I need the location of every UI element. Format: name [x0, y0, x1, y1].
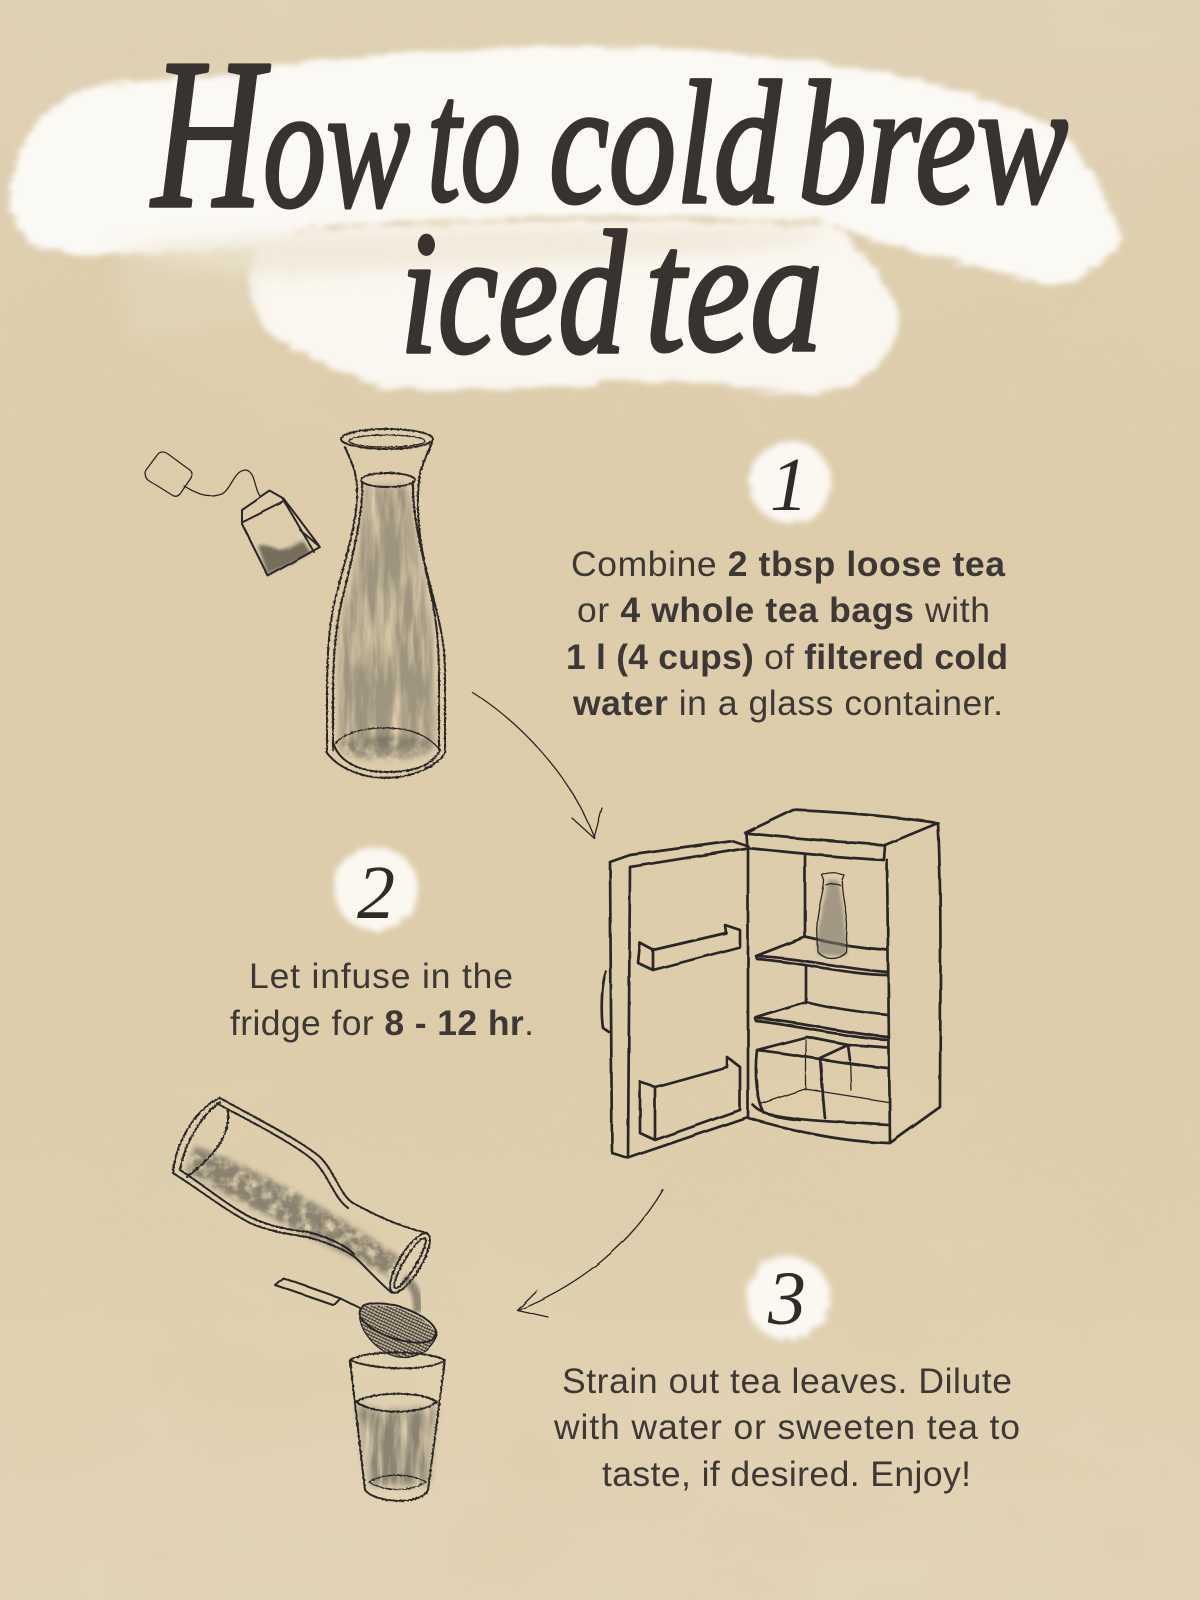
word: iced: iced — [400, 196, 627, 391]
line 2: fridge for 8 - 12 hr. — [230, 1003, 534, 1043]
number blot — [334, 847, 418, 931]
fridge interior back — [805, 855, 806, 1003]
line 3: 1 l (4 cups) of filtered cold — [566, 637, 1008, 677]
tea stream — [404, 1278, 418, 1312]
line 4: water in a glass container. — [572, 683, 1003, 723]
lower door shelf — [640, 1057, 740, 1140]
step 2 text — [230, 956, 534, 1043]
line 1: Let infuse in the — [249, 956, 513, 996]
white brush strokes behind title — [10, 46, 1122, 393]
strainer bowl — [360, 1305, 437, 1357]
fridge body — [745, 810, 940, 1143]
number blot — [746, 1256, 830, 1340]
title line 2 — [400, 194, 823, 391]
step 1 number — [749, 441, 831, 527]
step 3 text — [553, 1361, 1020, 1494]
number 3: 3 — [767, 1257, 806, 1341]
carafe base shading — [340, 736, 430, 760]
illustration: strainer — [275, 1278, 441, 1357]
faint dry brush at left — [115, 250, 258, 340]
arrow: step 1 to fridge — [472, 692, 602, 838]
word: cold: cold — [549, 46, 782, 241]
arrow: fridge to step 3 — [517, 1190, 663, 1317]
line 3: taste, if desired. Enjoy! — [602, 1454, 971, 1494]
carafe lines — [327, 429, 445, 778]
tea bag tag — [145, 452, 192, 496]
illustration: glass of tea — [350, 1352, 445, 1501]
word: to: to — [427, 44, 521, 239]
mini carafe — [817, 873, 847, 958]
step 2 number — [334, 847, 418, 935]
word: How: How — [150, 14, 410, 253]
tea bag string — [184, 470, 261, 497]
line 2: or 4 whole tea bags with — [577, 590, 990, 630]
upper door shelf — [638, 925, 740, 970]
fridge door handle — [602, 972, 609, 1032]
line 1: Combine 2 tbsp loose tea — [571, 544, 1005, 584]
step 1 text — [566, 544, 1008, 723]
line 2: with water or sweeten tea to — [553, 1407, 1020, 1447]
title line 1 — [150, 14, 1068, 253]
illustration: glass carafe — [327, 429, 445, 778]
carafe shading — [338, 486, 436, 748]
tea bag leaves — [258, 541, 311, 575]
title — [150, 14, 1068, 391]
word: brew: brew — [798, 46, 1068, 241]
pour carafe lines — [173, 1098, 437, 1298]
cream band between brush strokes — [110, 226, 830, 276]
number 2: 2 — [357, 851, 395, 935]
number blot — [749, 441, 831, 523]
word: tea: tea — [645, 194, 823, 389]
strainer handle — [275, 1278, 360, 1308]
tea bag body — [242, 491, 320, 576]
fridge door — [610, 841, 748, 1158]
illustration: tea bag — [145, 452, 320, 576]
number 1: 1 — [770, 443, 808, 527]
glass shading — [357, 1405, 436, 1485]
glass lines — [350, 1352, 445, 1501]
step 3 number — [746, 1256, 830, 1341]
fridge shelves — [756, 937, 888, 975]
illustration: pouring carafe — [173, 1098, 437, 1312]
line 1: Strain out tea leaves. Dilute — [562, 1361, 1012, 1401]
illustration: open fridge — [602, 810, 940, 1158]
fridge drawer — [753, 1037, 888, 1125]
pour shading — [186, 1146, 400, 1278]
